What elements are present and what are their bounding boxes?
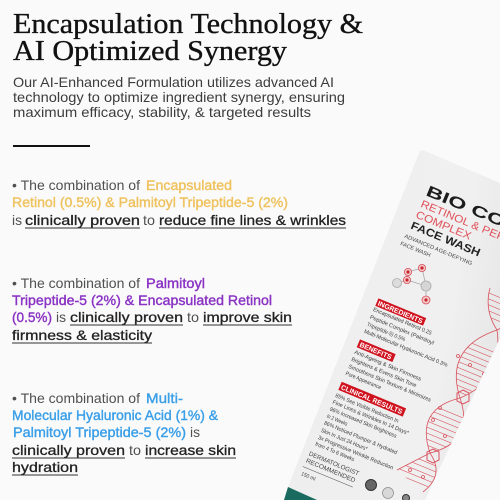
bullet: fine lines: • The combination of (12, 177, 140, 193)
clinical results section: 3x Progressive Wrinkle Reduction (317, 435, 394, 472)
clinical results section: Skin In Just 24 Hours* (320, 428, 369, 453)
dermatologist recommended (301, 451, 360, 488)
bullet: fine lines: reduce fine lines & wrinkles (159, 212, 346, 228)
bullet: firmness: is (56, 309, 66, 325)
bullet: hydration: to (129, 442, 141, 458)
bullet: hydration: • The combination of (12, 390, 140, 406)
molecule icon (392, 264, 431, 304)
bullet: hydration: Multi- (146, 390, 183, 406)
bullet: hydration (12, 390, 236, 475)
bullet: firmness: clinically proven (70, 309, 183, 325)
benefits section (346, 339, 431, 402)
product name: COMPLEX (414, 209, 473, 243)
clinical results section: 86% Noticed Plumper & Hydrated (323, 421, 398, 456)
clinical results section: CLINICAL RESULTS (340, 384, 404, 416)
dermatologist recommended: DERMATOLOGIST (308, 451, 360, 478)
bullet: firmness (12, 275, 292, 343)
tube green cap (284, 487, 317, 500)
clinical results section: 85% See Visible Reduction In (334, 393, 399, 425)
ingredients section (364, 298, 448, 367)
ingredients section: Multi-Molecular Hyaluronic Acid 0.3% (363, 329, 448, 369)
clinical results section (315, 382, 409, 470)
bullet: firmness: Palmitoyl (146, 275, 205, 291)
brand name: BIO CO (423, 183, 500, 231)
tube body (284, 150, 500, 500)
product name: ADVANCED AGE-DEFYING (403, 234, 473, 267)
intro paragraph: maximum efficacy, stability, & targeted results (13, 104, 311, 120)
title: Encapsulation Technology & (13, 9, 363, 40)
clinical results section: 96% Increased Skin Brightness (329, 407, 398, 440)
bullet: hydration: clinically proven (12, 442, 125, 458)
benefits section: Anti-Ageing & Skin Firmness (353, 350, 422, 383)
title: AI Optimized Synergy (13, 36, 287, 67)
bullet: hydration: hydration (12, 459, 78, 475)
product name: FACE WASH (409, 220, 482, 259)
bullet: firmness: to (187, 309, 199, 325)
benefits section: Pore Appearance (344, 371, 382, 391)
clinical results section: from 4 To 6 Weeks (314, 442, 355, 463)
bullet: fine lines: clinically proven (25, 212, 140, 228)
benefits section: Brightens & Evens Skin Tone (350, 357, 417, 389)
ingredients section: Tripeptide-5) 0.5% (366, 322, 406, 343)
ingredients section: Encapsulated Retinol 0.25 (372, 307, 432, 337)
bullet: hydration: increase skin (145, 442, 236, 458)
bullet: firmness: • The combination of (12, 275, 140, 291)
intro paragraph (13, 74, 345, 120)
bullet: fine lines: Retinol (0.5%) & Palmitoyl Tripeptide-5 (2%) (12, 194, 288, 210)
intro paragraph: technology to optimize ingredient synergy, ensuring (13, 89, 345, 105)
clinical results section: In 2 Weeks (326, 414, 348, 428)
product name: FACE WASH (399, 241, 431, 259)
intro paragraph: Our AI-Enhanced Formulation utilizes advanced AI (13, 74, 334, 90)
clinical results section: Fine Lines & Wrinkles In 14 Days* (331, 400, 410, 437)
bullet: fine lines (12, 177, 346, 228)
benefits section: BENEFITS (358, 342, 393, 361)
bullet: firmness: firmness & elasticity (12, 327, 152, 343)
bullet: fine lines: is (12, 212, 22, 228)
bullet: firmness: Tripeptide-5 (2%) & Encapsulated Retinol (12, 292, 272, 308)
dermatologist recommended: 150 ml (300, 471, 316, 483)
product tube (284, 150, 500, 500)
benefits section: Smoothens Skin Texture & Minimizes (347, 364, 432, 404)
bullet: firmness: improve skin (203, 309, 292, 325)
bullet: hydration: Palmitoyl Tripeptide-5 (2%) (13, 424, 186, 440)
bullet: firmness: (0.5%) (12, 309, 52, 325)
ingredients section: Peptide Complex (Palmitoyl (369, 315, 435, 347)
product name (400, 200, 500, 265)
bullet: fine lines: Encapsulated (146, 177, 232, 193)
title (13, 9, 363, 67)
dermatologist recommended: RECOMMENDED (305, 458, 357, 484)
dna graphic (396, 288, 500, 492)
bullet: hydration: Molecular Hyaluronic Acid (1%) & (12, 407, 219, 423)
ingredients section: INGREDIENTS (376, 301, 424, 326)
product name: RETINOL & PEP (419, 198, 500, 244)
badges (366, 480, 410, 500)
bullet: fine lines: to (143, 212, 155, 228)
tube label text (299, 180, 500, 500)
divider rule (13, 145, 90, 147)
bullet: hydration: is (190, 424, 200, 440)
